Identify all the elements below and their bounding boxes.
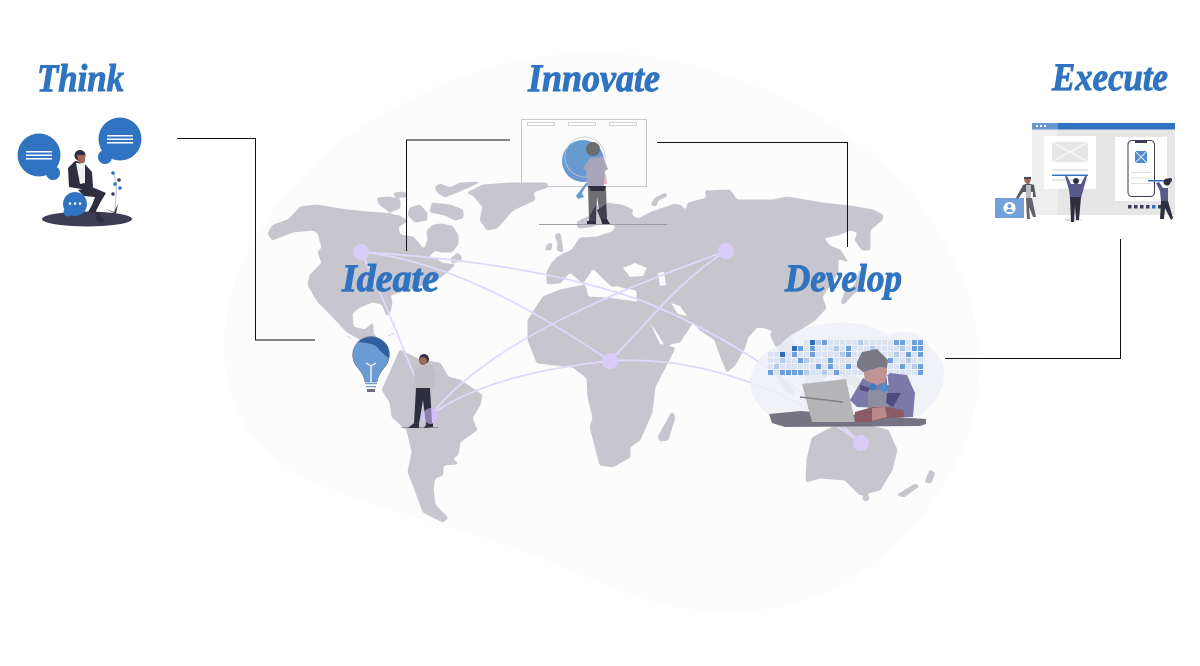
illustration: Think [18,118,142,226]
heading: Ideate: Ideate [341,257,439,300]
small speech bubble seat [63,192,87,216]
Southeast Asia and Indonesia [770,333,868,395]
heading: Execute: Execute [1051,56,1168,99]
circle outline [565,137,605,177]
person leaning on card [1016,177,1036,219]
blue circle [562,140,604,182]
profile card [995,198,1024,218]
Japan [841,270,863,304]
light bulb [353,336,390,392]
Madagascar [658,412,675,441]
right speech bubble [98,118,142,164]
British Isles [545,233,563,252]
desk [769,411,926,427]
developer [850,349,915,422]
North America [268,205,458,358]
window tabs [528,122,636,126]
heading: Innovate: Innovate [527,57,660,100]
connector: Innovate to Develop [657,142,848,247]
background blob [224,52,979,613]
Novaya Zemlya [651,193,667,206]
standing person [402,354,438,428]
Africa [528,285,675,467]
Tasmania [863,495,869,501]
connector: Ideate to Innovate [406,140,510,251]
heading: Develop: Develop [784,257,902,300]
inland seas [623,263,687,316]
data grid [768,340,924,376]
illustration: Develop [750,323,944,427]
network nodes [353,243,869,451]
right card with phone [1115,137,1167,201]
left speech bubble [18,134,60,180]
bulb rays [347,333,394,339]
person with pointer [1148,178,1173,220]
illustration: Ideate [347,333,438,428]
Eurasia [547,190,883,372]
standing person [583,142,610,224]
plant [106,171,122,214]
heading: Think: Think [37,57,124,100]
cloud backdrop [750,323,944,424]
ground shadow [42,212,132,226]
brush [576,183,588,199]
browser title bar [1032,123,1175,130]
person holding bar [1052,174,1088,222]
ground line [539,224,667,226]
Australia [806,423,897,495]
laptop [802,379,855,422]
seated person [68,150,106,224]
network lines [361,251,861,443]
New Zealand [897,470,935,497]
connector: Develop to Execute [945,239,1120,358]
pagination dots [1128,205,1162,208]
South America [382,350,482,522]
Greenland [467,183,548,230]
window frame [522,120,646,186]
illustration: Execute [995,123,1175,222]
node over person [423,408,439,424]
illustration: Innovate [522,120,667,224]
Arctic islands [377,182,480,262]
world map [268,182,935,522]
browser window body [1032,123,1175,215]
connector: Think to Ideate [177,138,315,340]
left card [1044,136,1096,189]
